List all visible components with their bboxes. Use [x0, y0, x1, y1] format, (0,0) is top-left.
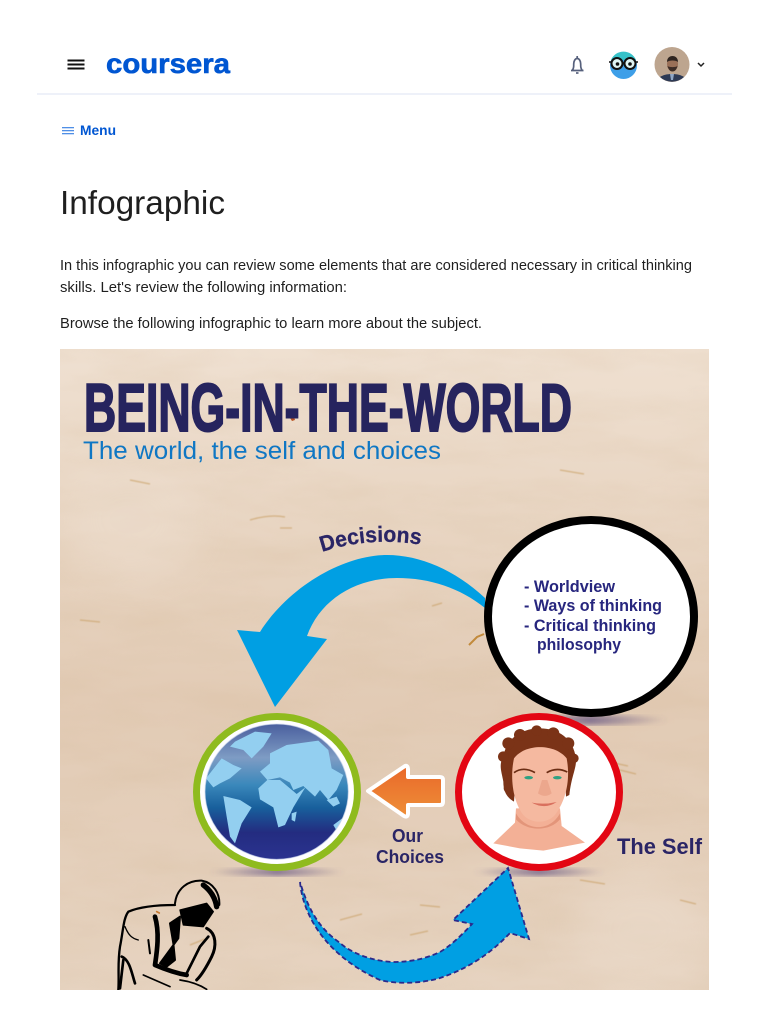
worldview list: - Ways of thinking — [524, 596, 662, 615]
label: our choices — [376, 829, 444, 863]
label: the self: The Self — [617, 834, 703, 859]
icon: hamburger menu — [68, 60, 84, 70]
header divider — [37, 94, 732, 95]
header bar — [68, 47, 704, 82]
icon: chevron down — [698, 63, 704, 66]
intro text block: In this infographic you can review some elements that are considered necessary in critical thinking — [60, 258, 692, 274]
shadow: self circle — [473, 868, 605, 876]
shadow: worldview circle — [554, 714, 658, 726]
circle: worldview — [488, 520, 694, 713]
label: our choices: Choices — [376, 847, 444, 867]
intro text block: skills. Let's review the following information: — [60, 280, 347, 296]
hair — [498, 725, 579, 802]
arrow: bottom dashed — [300, 868, 529, 983]
subtitle: The world, the self and choices — [83, 437, 441, 465]
icon: user profile photo — [654, 47, 690, 82]
worldview list: - Worldview — [524, 577, 616, 596]
circle: the self portrait — [458, 716, 620, 868]
parchment background — [60, 349, 710, 990]
eyes — [524, 776, 533, 779]
brows — [514, 769, 567, 773]
arrow: our choices — [368, 766, 443, 817]
label: our choices: Our — [392, 826, 423, 846]
infographic panel — [60, 349, 709, 990]
face — [512, 747, 568, 822]
arrow: decisions — [237, 555, 485, 707]
coursera logo: coursera — [106, 48, 230, 79]
neck and shoulders — [493, 808, 585, 851]
worldview list: philosophy — [537, 635, 621, 654]
icon: notification bell — [571, 56, 584, 73]
intro text block: Browse the following infographic to learn more about the subject. — [60, 316, 482, 332]
nose — [538, 780, 552, 796]
mouth — [532, 802, 557, 806]
menu link — [62, 123, 116, 138]
intro text block — [60, 258, 692, 332]
menu link: Menu — [80, 123, 116, 138]
label: decisions: Decisions — [319, 526, 421, 552]
circle: globe — [196, 716, 358, 868]
icon: owl avatar — [609, 52, 638, 79]
shadow: globe circle — [209, 868, 345, 876]
worldview list: - Critical thinking — [524, 616, 656, 635]
worldview list — [524, 577, 662, 654]
page heading: Infographic — [60, 184, 225, 221]
thinker statue — [118, 881, 219, 990]
